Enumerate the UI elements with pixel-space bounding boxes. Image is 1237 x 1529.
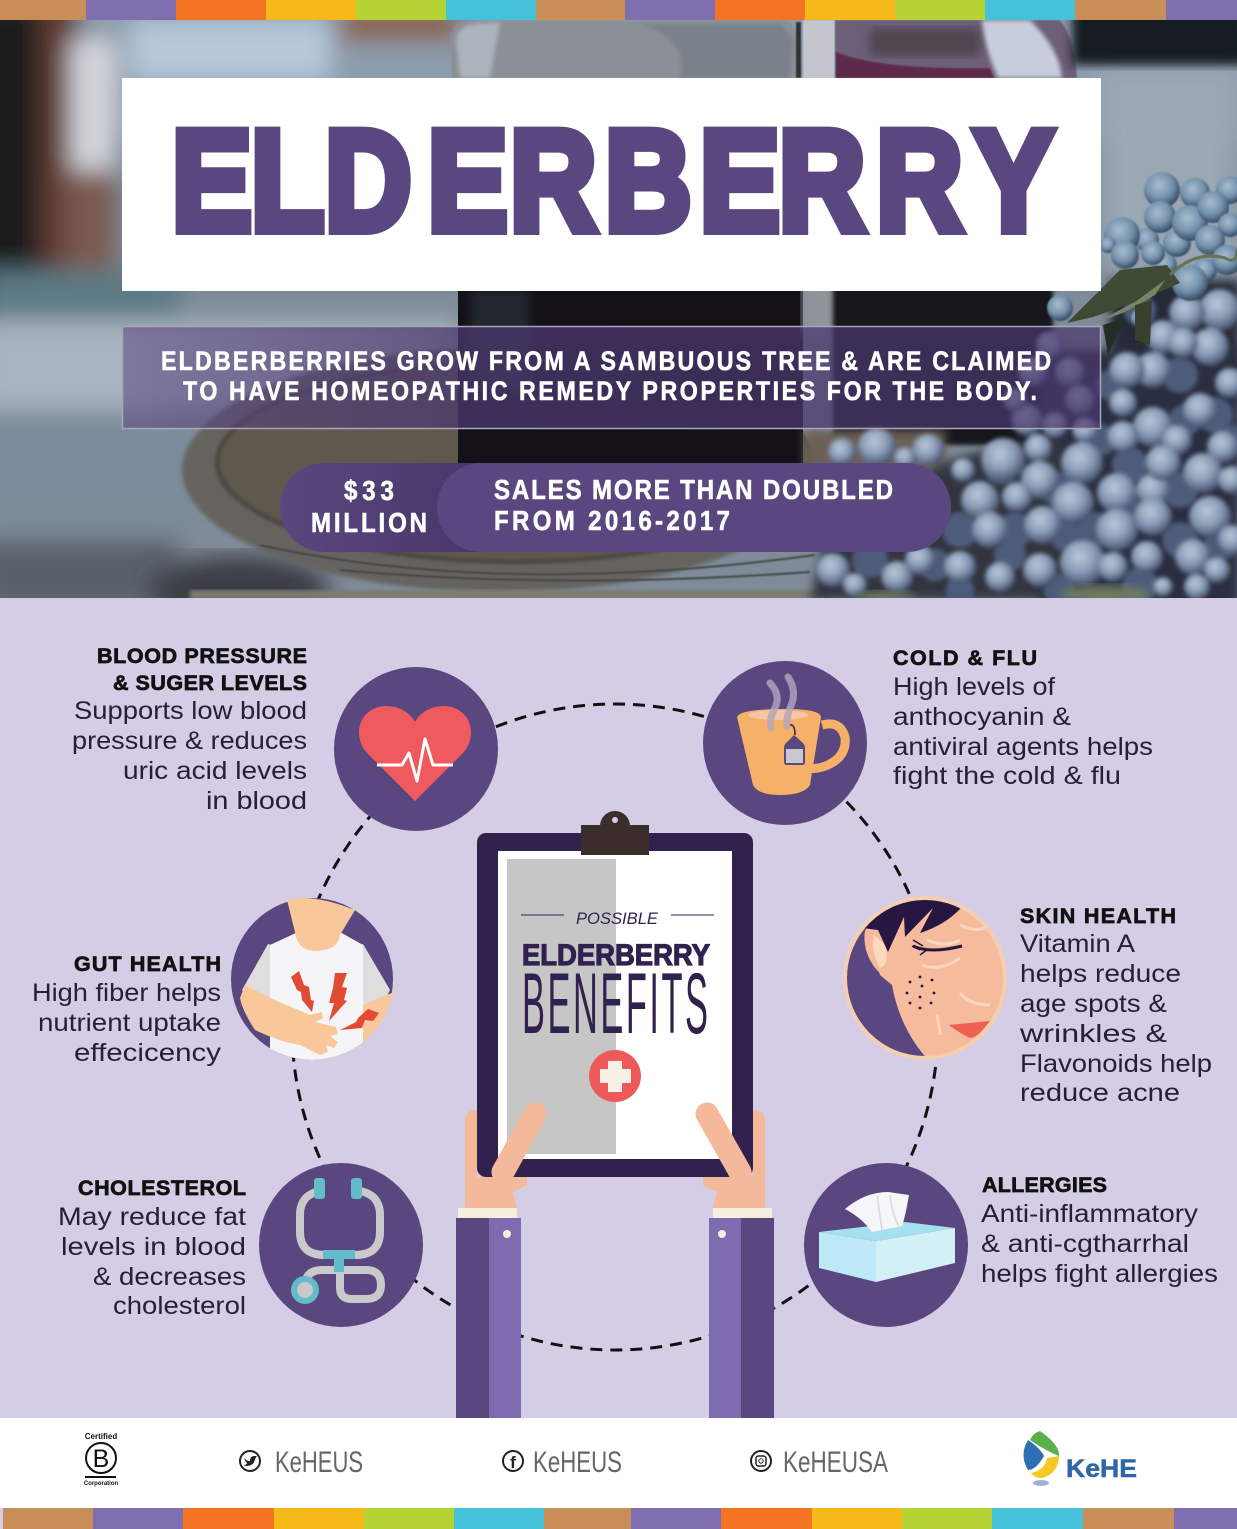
sales callout pill: $33 <box>344 474 394 506</box>
logo: KeHE: KeHE <box>1066 1455 1137 1483</box>
text: blood pressure and sugar: pressure & reduces <box>72 727 307 755</box>
social: twitter: KeHEUS <box>275 1446 363 1479</box>
text: allergies: helps fight allergies <box>981 1260 1218 1288</box>
title panel <box>122 78 1101 291</box>
footer band <box>0 1418 1237 1508</box>
text: skin health <box>1019 904 1212 1107</box>
text: allergies: Anti-inflammatory <box>981 1200 1199 1228</box>
page background <box>0 598 1237 1418</box>
icon: tea cup <box>703 661 867 825</box>
social: facebook <box>503 1446 622 1479</box>
text: cholesterol: CHOLESTEROL <box>78 1176 246 1200</box>
clipboard title: ELDERBERRY <box>522 939 710 972</box>
text: cold and flu <box>893 646 1153 790</box>
clipboard board <box>477 833 753 1177</box>
text: skin health: Vitamin A <box>1020 930 1135 958</box>
sales callout pill: FROM 2016-2017 <box>494 504 730 536</box>
icon: person with stomach pain <box>231 898 394 1065</box>
text: cholesterol: & decreases <box>93 1263 246 1291</box>
social: twitter <box>240 1446 363 1479</box>
text: skin health: Flavonoids help <box>1020 1050 1212 1078</box>
text: cholesterol: May reduce fat <box>58 1203 246 1231</box>
bottom colour stripe <box>3 1508 1237 1529</box>
text: skin health: SKIN HEALTH <box>1020 904 1176 928</box>
text: cholesterol: levels in blood <box>61 1233 246 1261</box>
intro text panel: TO HAVE HOMEOPATHIC REMEDY PROPERTIES FOR THE BODY. <box>183 376 1037 406</box>
clipboard title: BENEFITS <box>522 956 708 1051</box>
text: blood pressure and sugar: & SUGER LEVELS <box>113 671 307 695</box>
berries <box>1110 280 1237 400</box>
text: gut health <box>32 952 222 1067</box>
top colour stripe <box>0 0 1237 20</box>
social: instagram <box>751 1446 888 1479</box>
sales callout pill: MILLION <box>311 506 427 538</box>
text: gut health: nutrient uptake <box>38 1009 221 1037</box>
text: blood pressure and sugar: Supports low blood <box>74 697 307 725</box>
icon: stethoscope <box>259 1163 423 1327</box>
logo: certified B corporation: B <box>93 1445 109 1473</box>
logo: certified B corporation: Certified <box>85 1432 117 1441</box>
sleeves <box>456 1218 489 1418</box>
medical cross <box>589 1050 641 1102</box>
social: facebook: KeHEUS <box>533 1446 622 1479</box>
fingers <box>503 1114 740 1172</box>
text: cholesterol <box>58 1176 246 1320</box>
text: skin health: age spots & <box>1020 990 1167 1018</box>
text: cold and flu: COLD & FLU <box>893 646 1037 670</box>
intro text panel <box>122 326 1100 428</box>
cuffs <box>458 1208 517 1218</box>
plate <box>144 548 342 598</box>
logo: KeHE <box>1024 1431 1137 1486</box>
text: blood pressure and sugar <box>72 644 307 815</box>
text: allergies: ALLERGIES <box>982 1173 1107 1197</box>
sales callout pill <box>280 463 951 552</box>
text: skin health: wrinkles & <box>1019 1020 1167 1048</box>
text: cold and flu: anthocyanin & <box>893 703 1071 731</box>
sales callout pill: SALES MORE THAN DOUBLED <box>494 473 893 505</box>
illustration: hands holding clipboard <box>456 811 774 1418</box>
text: allergies: & anti-cgtharrhal <box>981 1230 1189 1258</box>
text: gut health: GUT HEALTH <box>74 952 221 976</box>
logo: certified B corporation <box>84 1432 118 1487</box>
text: blood pressure and sugar: BLOOD PRESSURE <box>97 644 307 668</box>
text: cholesterol: cholesterol <box>113 1292 246 1320</box>
icon: face with skin spots <box>840 895 1010 1065</box>
clipboard paper <box>498 851 732 1159</box>
hero photo: bottle, plate and elderberries <box>0 0 1237 625</box>
intro text panel: ELDBERBERRIES GROW FROM A SAMBUOUS TREE & ARE CLAIMED <box>161 346 1051 376</box>
text: gut health: High fiber helps <box>32 979 221 1007</box>
clip <box>581 811 649 855</box>
hand backs <box>465 1110 765 1208</box>
possible label: POSSIBLE <box>576 909 659 928</box>
text: gut health: effecicency <box>74 1039 222 1067</box>
title: ELDERBERRY <box>172 100 1054 260</box>
dashed ring connecting benefits <box>292 704 938 1350</box>
bottle and jars <box>458 285 803 465</box>
social: instagram: KeHEUSA <box>783 1446 888 1479</box>
icon: tissue box <box>804 1163 968 1327</box>
text: blood pressure and sugar: in blood <box>206 787 307 815</box>
text: blood pressure and sugar: uric acid levels <box>123 757 307 785</box>
icon: heart with pulse <box>334 667 498 831</box>
text: cold and flu: antiviral agents helps <box>893 733 1153 761</box>
text: skin health: reduce acne <box>1020 1079 1180 1107</box>
text: allergies <box>981 1173 1218 1288</box>
text: cold and flu: High levels of <box>893 673 1055 701</box>
social: facebook: f <box>510 1453 516 1472</box>
text: skin health: helps reduce <box>1020 960 1181 988</box>
text: cold and flu: fight the cold & flu <box>893 762 1121 790</box>
logo: certified B corporation: Corporation <box>84 1481 118 1487</box>
